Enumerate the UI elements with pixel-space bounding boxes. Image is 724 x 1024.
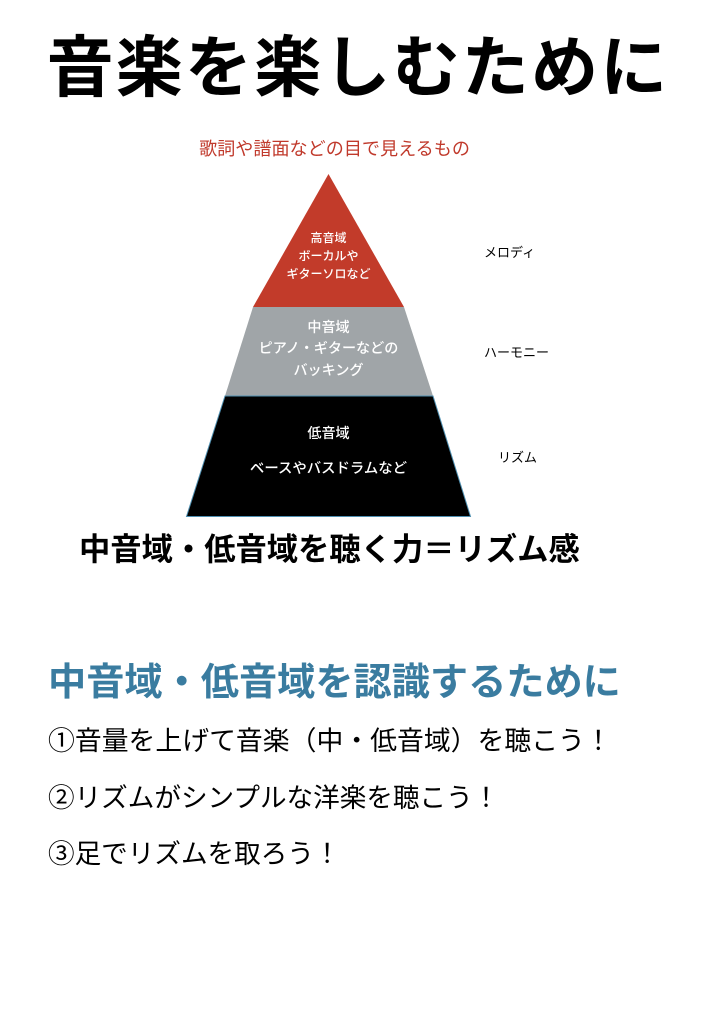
pyramid caption: 歌詞や譜面などの目で見えるもの [199,139,470,159]
tier: low range [186,396,470,516]
pyramid chart [186,174,470,516]
tip 3: ③足でリズムを取ろう！ [48,839,341,869]
tip 2: ②リズムがシンプルな洋楽を聴こう！ [48,783,499,813]
rhythm sense statement: 中音域・低音域を聴く力＝リズム感 [79,531,580,567]
tier: mid range [225,307,433,396]
tier: high range: ギターソロなど [286,267,371,281]
tier: low range: 低音域 [307,425,350,441]
label: melody: メロディ [484,245,535,260]
tier: high range [253,174,404,307]
tip 1: ①音量を上げて音楽（中・低音域）を聴こう！ [48,726,612,756]
title: 音楽を楽しむために [47,31,669,106]
tier: mid range: バッキング [293,362,364,378]
tips list [48,726,612,869]
section heading: 中音域・低音域を認識するために [48,661,621,704]
tier: high range: 高音域 [310,230,347,245]
tier: high range: ボーカルや [298,249,359,263]
label: rhythm: リズム [498,450,537,465]
tier: mid range: ピアノ・ギターなどの [259,340,398,356]
tier: low range: ベースやバスドラムなど [250,460,408,477]
label: harmony: ハーモニー [484,345,549,360]
tier: mid range: 中音域 [307,319,350,335]
